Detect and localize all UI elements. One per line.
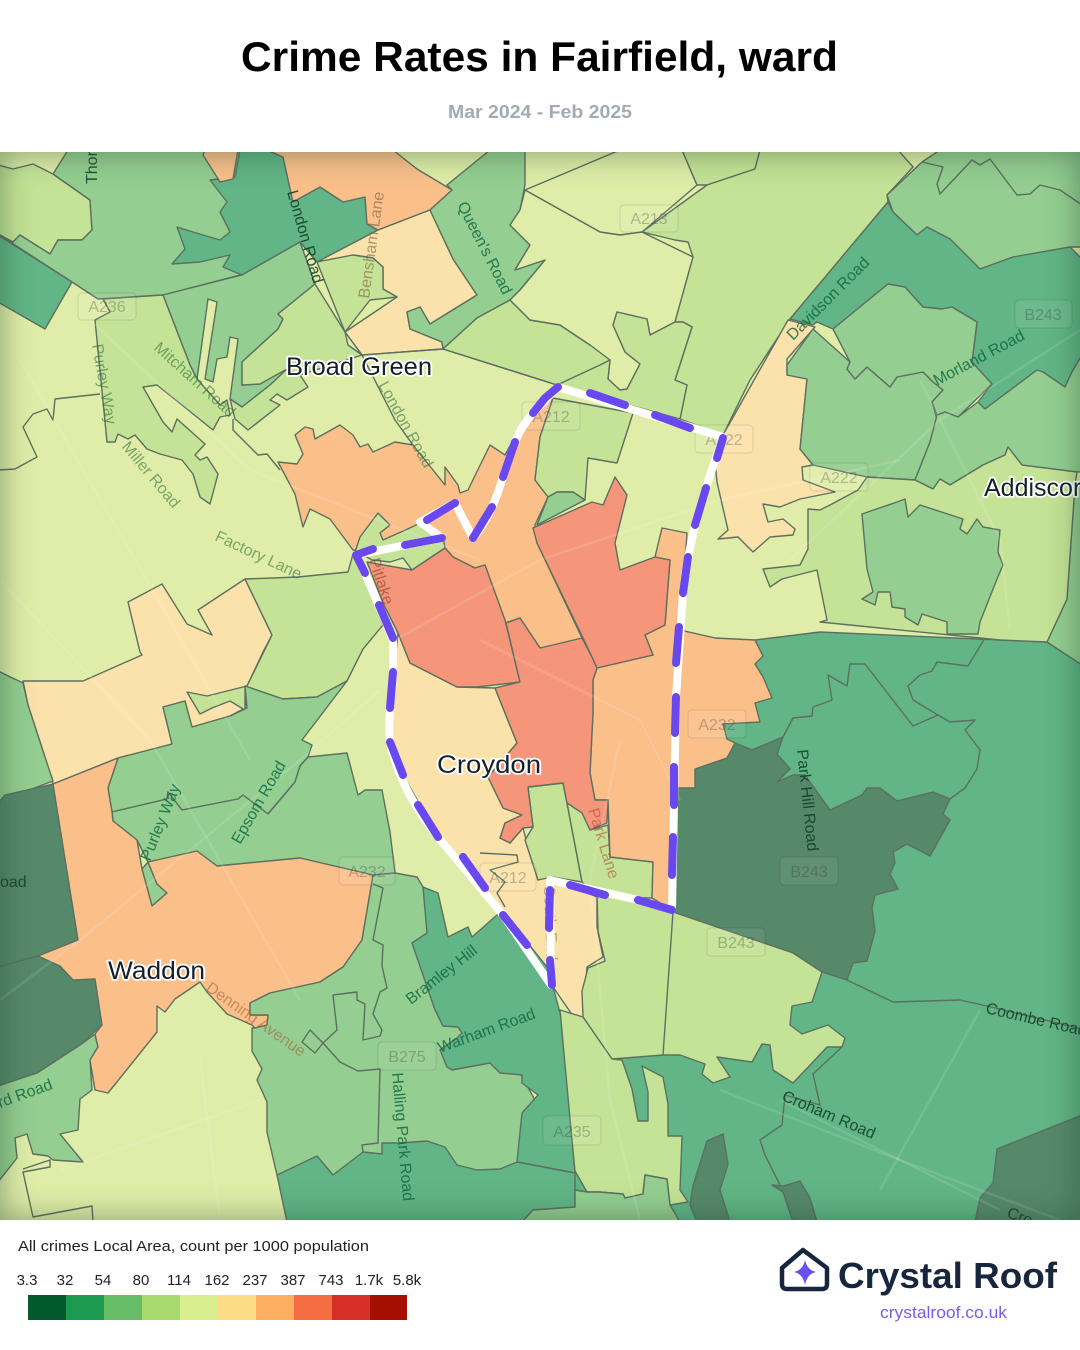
north-east green areas [510,150,1080,642]
road labels: Mitcham Road [150,339,238,421]
road labels [0,150,1080,1230]
choropleth regions [0,150,1080,1222]
road labels: Park Lane [584,806,622,881]
map panel [0,150,1080,1230]
subtitle: date range: Mar 2024 - Feb 2025 [448,102,632,122]
west: Waddon and surrounding areas [0,554,395,1222]
south: Bramley and Haling Park areas [250,873,845,1222]
legend colour bar [28,1295,407,1320]
logo: Crystal Roof [782,1250,1058,1296]
legend tick labels: 114 [167,1272,191,1289]
north-west green areas [0,150,640,504]
road labels: Factory Lane [212,528,304,583]
road number shields: A236 [88,299,126,316]
road number shields: A213 [630,211,668,228]
road labels: Halling Park Road [388,1072,416,1202]
road labels: Park Hill Road [793,749,821,852]
legend scale [17,1272,422,1320]
legend tick labels: 162 [204,1272,230,1289]
road number shields: A232 [698,717,736,734]
road labels: South End [540,886,560,961]
road labels: oad [0,874,27,891]
place label: Waddon: Waddon [108,957,205,985]
road labels: Morland Road [931,327,1028,390]
road network [0,320,1080,1220]
road number shields: B243 [1024,307,1062,324]
road number shields: A235 [553,1124,591,1141]
road labels: Croham Road [779,1088,878,1143]
road number shields: B243 [790,864,828,881]
road labels: Warham Road [436,1006,538,1057]
road labels: Epsom Road [229,758,290,847]
legend title: All crimes Local Area, count per 1000 population [18,1238,369,1255]
legend tick labels: 387 [280,1272,306,1289]
legend tick labels [17,1272,422,1289]
road number shields: A232 [348,864,386,881]
road number shields: A222 [705,432,743,449]
legend tick labels: 54 [95,1272,111,1289]
place label: Addiscombe: Addiscor [984,474,1080,502]
road labels: Bramley Hill [403,942,481,1008]
website link: crystalroof.co.uk [880,1304,1008,1322]
road number shields: B275 [388,1049,426,1066]
road labels: London Road [375,379,436,471]
road number shields: B243 [717,935,755,952]
east dark-mid green area [560,485,1080,1222]
legend tick labels: 32 [57,1272,73,1289]
road labels: Cro [1005,1205,1035,1230]
legend tick labels: 80 [133,1272,149,1289]
legend tick labels: 743 [318,1272,344,1289]
ward boundary: Fairfield [356,387,723,985]
place label: Broad Green: Broad Green [286,353,432,381]
icon: house with star [782,1250,827,1289]
title: Crime Rates in Fairfield, ward [241,33,838,80]
place label: Croydon: Croydon [437,751,541,779]
road labels: Purley Way [88,343,119,426]
road labels: Thor [84,150,101,184]
road number shields: A212 [532,409,570,426]
road labels: Denning Avenue [203,979,308,1061]
legend tick labels: 3.3 [17,1272,37,1289]
road number shields: A222 [820,470,858,487]
road labels: Davidson Road [784,254,873,344]
road labels: Bensham Lane [356,191,388,300]
road labels: Pitlake [365,556,396,607]
road labels: Queen's Road [453,199,515,298]
logo wordmark: Crystal Roof [838,1255,1058,1296]
road number shields [78,205,1072,1145]
road number shields: A212 [489,870,527,887]
road labels: Purley Way [138,782,184,863]
legend tick labels: 237 [242,1272,268,1289]
legend tick labels: 5.8k [393,1272,422,1289]
legend tick labels: 1.7k [355,1272,384,1289]
central ward: orange and salmon zones [278,398,772,1059]
road labels: London Road [283,188,326,285]
road labels: Miller Road [118,439,183,512]
